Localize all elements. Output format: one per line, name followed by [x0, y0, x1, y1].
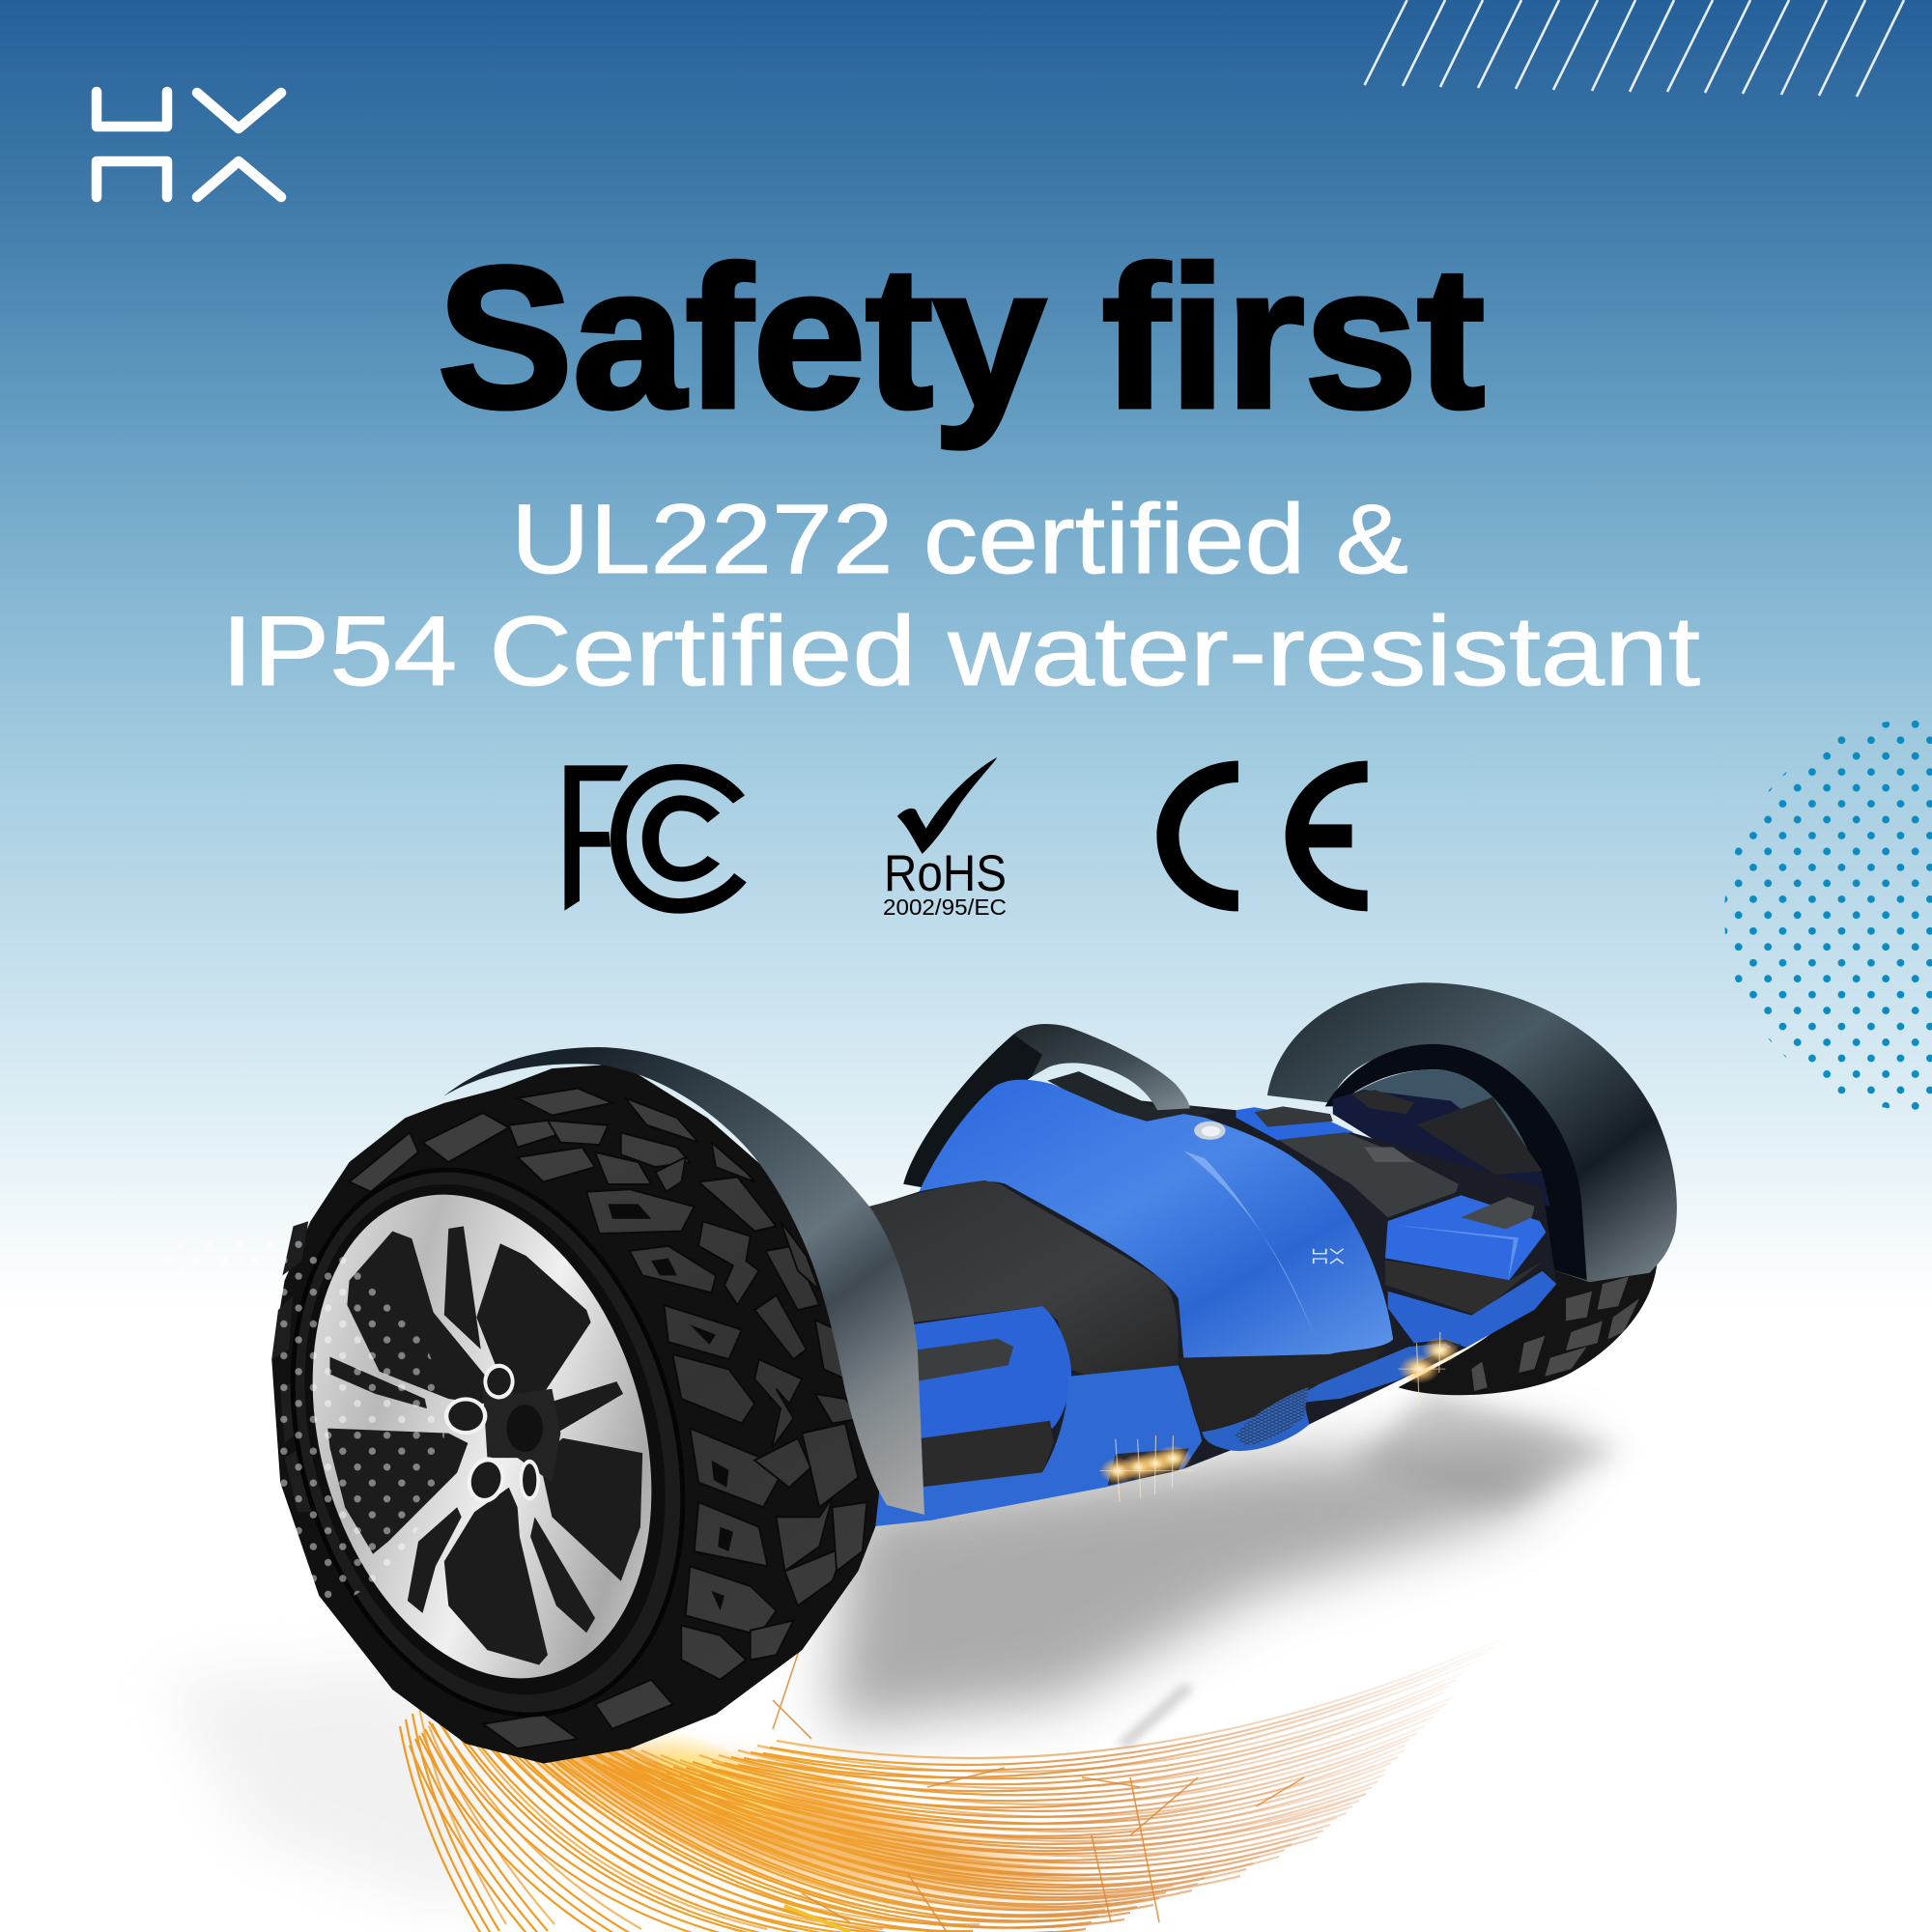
blue belly with mesh vent	[1202, 1343, 1456, 1451]
icon: RoHS mark	[883, 757, 1007, 920]
far wheel arch interior	[1325, 1044, 1587, 1280]
small HX logo	[1314, 1249, 1344, 1264]
body underlay	[838, 1086, 1556, 1520]
silver rim	[259, 1154, 705, 1719]
dark wheel pockets	[327, 1226, 642, 1664]
lower blue skirt	[859, 1365, 1202, 1528]
decorative diagonal lines	[1365, 0, 1904, 97]
hoverboard body	[838, 1024, 1556, 1528]
power button	[1194, 1122, 1226, 1140]
right LED strip	[1399, 1332, 1462, 1406]
subtitle line 1: UL2272 certified &	[511, 484, 1408, 594]
near wheel	[232, 1047, 924, 1764]
subtitle line 2: IP54 Certified water-resistant	[221, 596, 1700, 706]
sidewall ring	[232, 1123, 744, 1761]
ground shadows	[164, 1391, 1623, 1913]
far tyre	[1399, 1255, 1658, 1395]
far wheel	[1267, 982, 1677, 1395]
far fender	[1267, 982, 1677, 1282]
icon: FCC mark	[564, 764, 747, 914]
tyre with tread	[271, 1064, 880, 1764]
icon: RoHS mark: 2002/95/EC	[883, 895, 1007, 920]
blue shell	[919, 1080, 1393, 1358]
hub and lug nuts	[444, 1357, 560, 1511]
lower left blue box	[859, 1306, 1071, 1494]
near fender	[443, 1047, 924, 1515]
shell highlights	[1183, 1151, 1315, 1336]
sparks under the wheel	[400, 1639, 1501, 1932]
far foot deck	[1333, 1090, 1550, 1207]
rim lip	[247, 1141, 723, 1738]
front LED strip	[1099, 1435, 1194, 1502]
decorative white dots over the wheel	[272, 1240, 444, 1598]
right foot deck	[1236, 1106, 1556, 1348]
handle	[903, 1024, 1217, 1188]
dark side pod	[838, 1180, 1179, 1377]
decorative dot circle	[1719, 715, 1932, 1115]
centre black panel	[1179, 1347, 1385, 1430]
icon: CE mark	[1156, 761, 1368, 911]
title: Safety first	[438, 226, 1485, 450]
logo HX	[97, 92, 281, 197]
icon: RoHS mark: RoHS	[884, 845, 1007, 902]
